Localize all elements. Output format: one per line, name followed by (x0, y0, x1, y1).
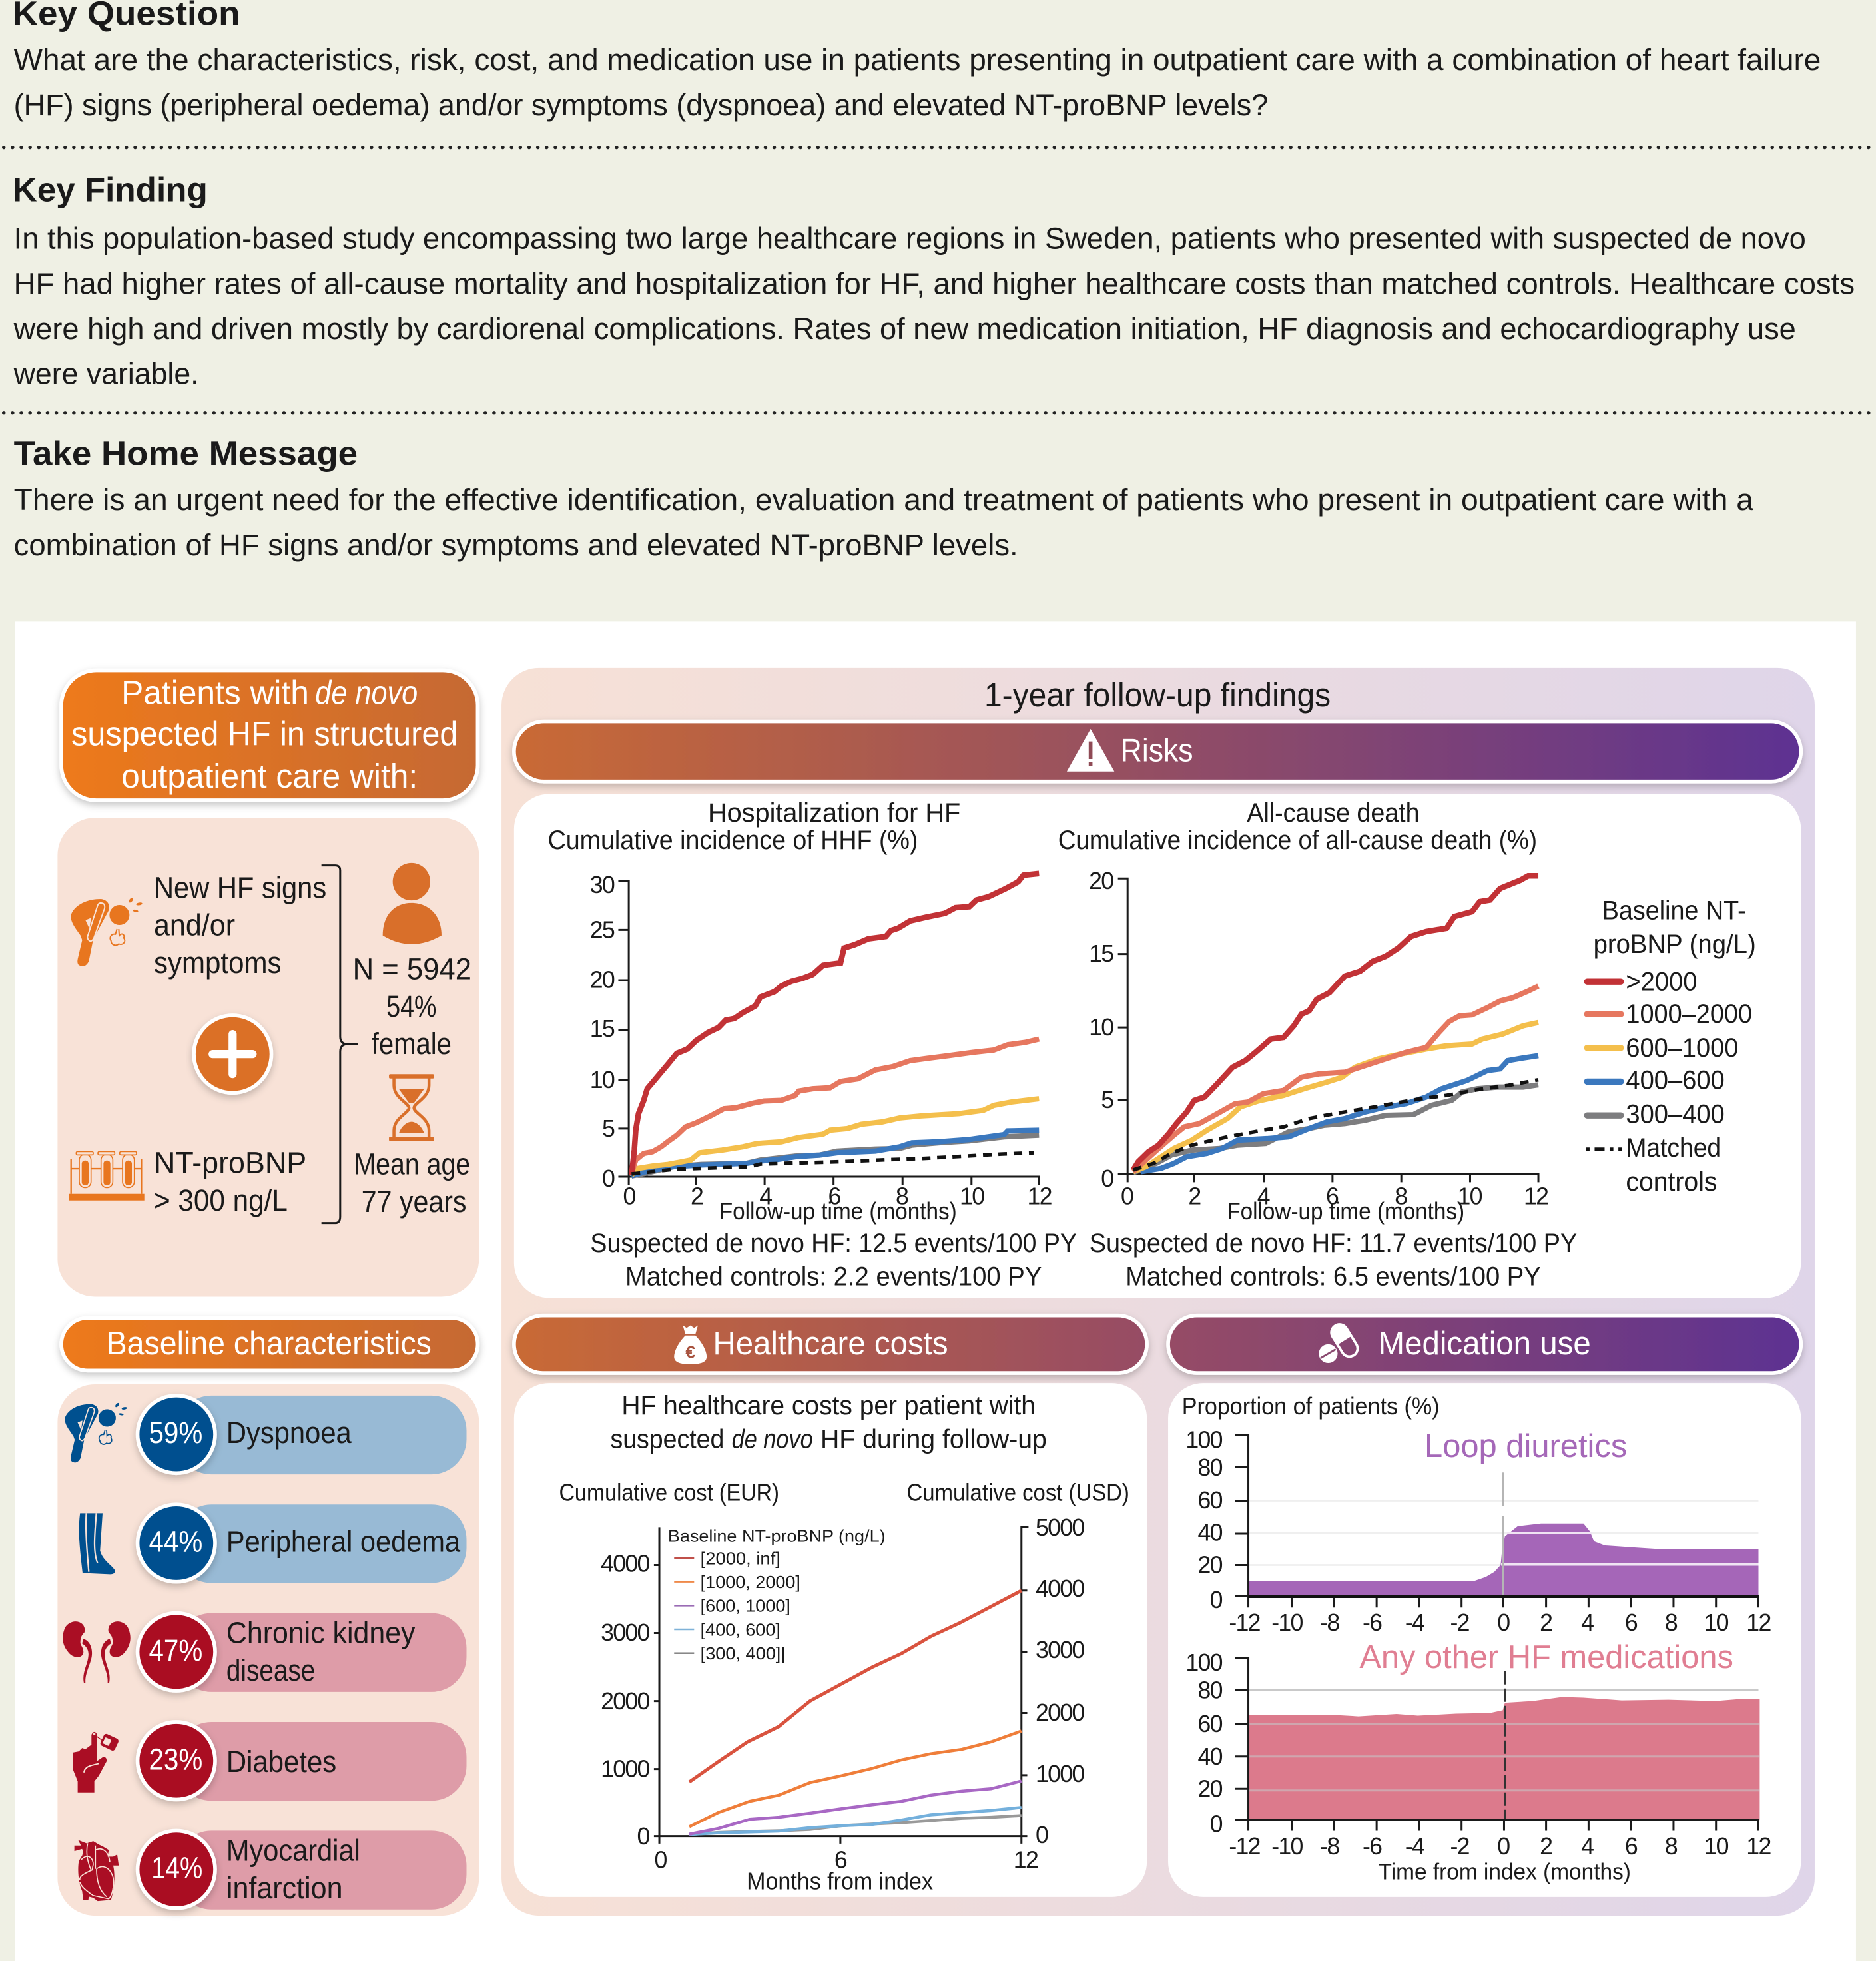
legend: cost chart (668, 1526, 886, 1663)
legend: cost chart: [600, 1000] (701, 1596, 790, 1616)
text block: key question (13, 0, 1821, 122)
row: diabetes: 23% (149, 1742, 202, 1776)
text: NT-proBNP threshold: > 300 ng/L (154, 1183, 288, 1217)
heading pill: medication use (1168, 1316, 1801, 1373)
text: mean age: Mean age (354, 1147, 470, 1181)
chart: all-cause death: Cumulative incidence of all-cause death (%) (1058, 826, 1537, 855)
row: peripheral oedema (79, 1504, 466, 1583)
panel: medication use charts (1168, 1383, 1801, 1897)
chart: any other HF medications: 8 (1665, 1833, 1678, 1860)
row: chronic kidney disease: disease (226, 1653, 315, 1687)
text: sample size and sex: female (372, 1027, 452, 1061)
chart: loop diuretics: -12 (1229, 1609, 1261, 1636)
chart: loop diuretics: 4 (1581, 1609, 1594, 1636)
panel: healthcare costs chart: 5000 (1036, 1514, 1084, 1541)
row: myocardial infarction: Myocardial (226, 1833, 360, 1867)
chart: hospitalization for HF: 2 (691, 1183, 703, 1210)
chart: hospitalization for HF: 10 (960, 1183, 984, 1210)
icon: dyspnoea figure (71, 897, 143, 966)
brace (322, 866, 358, 1223)
chart: hospitalization for HF: 15 (590, 1015, 615, 1042)
panel: healthcare costs chart (514, 1383, 1147, 1897)
chart: any other HF medications: 6 (1625, 1833, 1638, 1860)
row: chronic kidney disease: Chronic kidney (226, 1616, 416, 1650)
panel: healthcare costs chart: 0 (1036, 1822, 1048, 1848)
heading pill: patients with de novo suspected HF: suspected HF in structured (71, 714, 458, 752)
row: chronic kidney disease: 47% (149, 1633, 202, 1667)
row: diabetes: Diabetes (226, 1745, 336, 1779)
chart: hospitalization for HF: 4 (759, 1183, 772, 1210)
legend: baseline NT-proBNP: Baseline NT- (1602, 896, 1746, 925)
text: new HF signs and/or symptoms: New HF signs (154, 870, 326, 904)
text: sample size and sex: N = 5942 (353, 952, 471, 985)
chart: loop diuretics: 20 (1197, 1552, 1223, 1579)
legend: cost chart: Baseline NT-proBNP (ng/L) (668, 1526, 886, 1546)
panel: healthcare costs chart: 0 (655, 1847, 667, 1874)
chart: loop diuretics: -4 (1405, 1609, 1424, 1636)
chart: loop diuretics: 10 (1704, 1609, 1729, 1636)
row: chronic kidney disease (63, 1613, 466, 1692)
heading pill: baseline characteristics: Baseline characteristics (107, 1326, 432, 1362)
panel: healthcare costs chart: 2000 (601, 1688, 650, 1715)
chart: loop diuretics: Loop diuretics (1424, 1428, 1627, 1464)
panel: healthcare costs chart: 3000 (1036, 1637, 1084, 1663)
panel: healthcare costs chart: HF during follow-up (820, 1425, 1047, 1454)
row: dyspnoea: Dyspnoea (226, 1416, 352, 1450)
text block: take home message: Take Home Message (14, 435, 358, 473)
chart: all-cause death (1058, 798, 1577, 1292)
chart: any other HF medications: 4 (1581, 1833, 1594, 1860)
chart: all-cause death: 8 (1395, 1183, 1407, 1210)
chart: loop diuretics: 8 (1665, 1609, 1678, 1636)
chart: any other HF medications (1185, 1639, 1771, 1885)
chart: any other HF medications: -10 (1271, 1833, 1303, 1860)
chart: loop diuretics (1185, 1427, 1771, 1636)
text: NT-proBNP threshold (154, 1146, 306, 1217)
chart: all-cause death: Suspected de novo HF: 11.7 events/100 PY (1090, 1229, 1577, 1258)
panel: healthcare costs chart: Cumulative cost (USD) (907, 1480, 1129, 1506)
text block: key question: What are the characteristics, risk, cost, and medication use in patients presenting in outpatient care with a combination of heart failure (14, 43, 1821, 77)
panel: healthcare costs chart: 3000 (601, 1619, 650, 1646)
line chart: cumulative cost (654, 1527, 1028, 1844)
icon: money bag (674, 1326, 707, 1364)
text block: take home message (14, 435, 1754, 562)
chart: loop diuretics: 12 (1746, 1609, 1771, 1636)
heading pill: medication use: Medication use (1379, 1326, 1591, 1362)
row: myocardial infarction: 14% (151, 1851, 202, 1885)
row: myocardial infarction: infarction (226, 1871, 343, 1905)
chart: any other HF medications: 100 (1185, 1649, 1223, 1676)
chart: hospitalization for HF: Follow-up time (months) (719, 1198, 957, 1225)
text block: key finding: were variable. (13, 357, 199, 391)
text block: key finding (13, 170, 1855, 391)
panel: healthcare costs chart: de novo (732, 1425, 813, 1454)
chart: loop diuretics: 80 (1197, 1454, 1223, 1481)
legend: baseline NT-proBNP: >2000 (1626, 967, 1697, 996)
chart: hospitalization for HF: 10 (590, 1067, 615, 1093)
chart: all-cause death: 2 (1188, 1183, 1201, 1210)
panel: healthcare costs chart: 1000 (601, 1756, 650, 1783)
chart: any other HF medications: -2 (1450, 1833, 1470, 1860)
chart: hospitalization for HF: 8 (896, 1183, 908, 1210)
heading pill: patients with de novo suspected HF (61, 671, 477, 800)
chart: loop diuretics: 0 (1497, 1609, 1510, 1636)
text block: key finding: were high and driven mostly by cardiorenal complications. Rates of new medication initiation, HF diagnosis and echocardiography use (13, 312, 1796, 346)
chart: hospitalization for HF: 0 (602, 1165, 615, 1192)
legend: baseline NT-proBNP: Matched (1626, 1133, 1721, 1163)
row: dyspnoea: 59% (149, 1416, 202, 1450)
chart: all-cause death: 10 (1457, 1183, 1482, 1210)
row: peripheral oedema: 44% (149, 1525, 202, 1559)
heading pill: baseline characteristics (61, 1318, 477, 1370)
heading: 1-year follow-up findings: 1-year follow-up findings (984, 676, 1331, 714)
chart: any other HF medications: 0 (1497, 1833, 1510, 1860)
legend: cost chart: [300, 400]| (701, 1643, 785, 1663)
text: NT-proBNP threshold: NT-proBNP (154, 1146, 306, 1180)
heading pill: patients with de novo suspected HF: de novo (315, 673, 418, 711)
chart: all-cause death: All-cause death (1247, 798, 1420, 828)
chart: hospitalization for HF: 20 (590, 967, 615, 993)
icon: pills (1319, 1321, 1361, 1363)
chart: hospitalization for HF: 0 (623, 1183, 636, 1210)
chart: any other HF medications: -12 (1229, 1833, 1261, 1860)
text: sample size and sex: 54% (386, 989, 436, 1023)
text block: key finding: In this population-based study encompassing two large healthcare regions in Sweden, patients who presented with suspected de novo (14, 222, 1806, 256)
panel: healthcare costs chart: 4000 (1036, 1575, 1084, 1602)
chart: hospitalization for HF: 30 (590, 872, 615, 898)
legend: cost chart: [2000, inf] (701, 1548, 781, 1568)
chart: loop diuretics: 60 (1197, 1487, 1223, 1514)
chart: loop diuretics: 6 (1625, 1609, 1638, 1636)
text: new HF signs and/or symptoms: and/or (154, 908, 235, 942)
panel: healthcare costs chart: suspected (610, 1425, 724, 1454)
chart: loop diuretics: 0 (1210, 1587, 1223, 1613)
heading pill: healthcare costs: Healthcare costs (713, 1326, 948, 1362)
chart: any other HF medications: 60 (1197, 1711, 1223, 1737)
legend: cost chart: [1000, 2000] (701, 1572, 800, 1592)
chart: all-cause death: 5 (1101, 1087, 1113, 1113)
chart: any other HF medications: Any other HF medications (1359, 1639, 1733, 1675)
chart: all-cause death: 12 (1524, 1183, 1548, 1210)
heading pill: patients with de novo suspected HF: outpatient care with: (121, 757, 418, 795)
chart: any other HF medications: -4 (1405, 1833, 1424, 1860)
text block: key finding: Key Finding (13, 170, 208, 208)
chart: any other HF medications: 80 (1197, 1677, 1223, 1703)
chart: all-cause death: Matched controls: 6.5 events/100 PY (1125, 1262, 1541, 1292)
panel: inclusion criteria and demographics (57, 818, 479, 1296)
panel: 1-year follow-up findings (501, 668, 1815, 1916)
chart: hospitalization for HF: 5 (602, 1115, 615, 1142)
legend: baseline NT-proBNP: 600–1000 (1626, 1033, 1738, 1063)
chart: hospitalization for HF: Matched controls: 2.2 events/100 PY (625, 1262, 1042, 1292)
panel: healthcare costs chart: Months from index (747, 1868, 933, 1895)
icon: hourglass (389, 1074, 434, 1141)
chart: any other HF medications: -6 (1363, 1833, 1382, 1860)
chart: any other HF medications: 20 (1197, 1776, 1223, 1803)
chart: hospitalization for HF: Suspected de novo HF: 12.5 events/100 PY (590, 1229, 1077, 1258)
chart: any other HF medications: Time from index (months) (1379, 1860, 1631, 1885)
chart: all-cause death: 15 (1089, 940, 1113, 967)
text block: take home message: There is an urgent need for the effective identification, evaluation and treatment of patients who present in outpatient care with a (14, 483, 1754, 517)
chart: all-cause death: 20 (1089, 868, 1113, 894)
panel: baseline characteristics (57, 1384, 479, 1916)
legend: cost chart: [400, 600] (701, 1619, 781, 1639)
text block: key question: (HF) signs (peripheral oedema) and/or symptoms (dyspnoea) and elevated NT-proBNP levels? (14, 88, 1268, 122)
chart: loop diuretics: 2 (1540, 1609, 1552, 1636)
text: mean age: 77 years (362, 1185, 466, 1219)
chart: any other HF medications: 40 (1197, 1743, 1223, 1770)
chart: loop diuretics: -8 (1320, 1609, 1339, 1636)
row: myocardial infarction (75, 1830, 466, 1910)
chart: all-cause death: 0 (1121, 1183, 1133, 1210)
chart: any other HF medications: 0 (1210, 1811, 1223, 1837)
icon: person (383, 863, 442, 944)
panel: healthcare costs chart: 6 (834, 1847, 847, 1874)
chart: hospitalization for HF: Hospitalization for HF (708, 798, 960, 828)
chart: all-cause death: 10 (1089, 1014, 1113, 1041)
row: diabetes (73, 1722, 466, 1801)
chart: any other HF medications: -8 (1320, 1833, 1339, 1860)
panel: medication use charts: Proportion of patients (%) (1182, 1393, 1440, 1420)
chart: loop diuretics: 40 (1197, 1520, 1223, 1546)
heading pill: healthcare costs (514, 1316, 1147, 1373)
legend: baseline NT-proBNP: proBNP (ng/L) (1594, 930, 1756, 959)
chart: all-cause death: 6 (1326, 1183, 1339, 1210)
text: mean age (354, 1147, 470, 1219)
legend: baseline NT-proBNP (1586, 896, 1756, 1197)
panel: healthcare costs chart: 1000 (1036, 1761, 1084, 1787)
text block: key finding: HF had higher rates of all-cause mortality and hospitalization for HF, and higher healthcare costs than matched controls. Healthcare costs (14, 266, 1855, 300)
panel: healthcare costs chart: HF healthcare costs per patient with (621, 1391, 1036, 1420)
chart: any other HF medications: 2 (1540, 1833, 1552, 1860)
chart: hospitalization for HF (548, 798, 1077, 1292)
row: dyspnoea (65, 1396, 466, 1474)
chart: hospitalization for HF: 12 (1027, 1183, 1052, 1210)
chart: hospitalization for HF: 25 (590, 916, 615, 943)
chart: loop diuretics: -10 (1271, 1609, 1303, 1636)
text: new HF signs and/or symptoms (154, 870, 326, 980)
chart: loop diuretics: -2 (1450, 1609, 1470, 1636)
legend: baseline NT-proBNP: 300–400 (1626, 1099, 1725, 1129)
chart: all-cause death: 4 (1257, 1183, 1270, 1210)
chart: loop diuretics: 100 (1185, 1427, 1223, 1454)
text: new HF signs and/or symptoms: symptoms (154, 946, 282, 980)
panel: healthcare costs chart: 12 (1014, 1847, 1038, 1874)
text: sample size and sex (353, 952, 471, 1061)
legend: baseline NT-proBNP: 400–600 (1626, 1066, 1725, 1095)
chart: all-cause death: 0 (1101, 1165, 1113, 1192)
panel: healthcare costs chart: 0 (637, 1823, 650, 1850)
chart: hospitalization for HF: Cumulative incidence of HHF (%) (548, 826, 918, 855)
heading pill: patients with de novo suspected HF: Patients with (121, 673, 309, 711)
legend: baseline NT-proBNP: 1000–2000 (1626, 999, 1752, 1029)
panel: healthcare costs chart: 2000 (1036, 1699, 1084, 1726)
legend: baseline NT-proBNP: controls (1626, 1167, 1717, 1197)
heading pill: risks: Risks (1121, 733, 1193, 769)
chart: any other HF medications: 10 (1704, 1833, 1729, 1860)
icon: test tubes (69, 1151, 145, 1201)
icon: plus (194, 1015, 272, 1093)
white figure panel (15, 621, 1856, 1961)
heading pill: risks (514, 722, 1801, 782)
panel: healthcare costs chart: Cumulative cost (EUR) (559, 1480, 779, 1506)
chart: hospitalization for HF: 6 (828, 1183, 841, 1210)
chart: any other HF medications: 12 (1746, 1833, 1771, 1860)
chart: all-cause death: Follow-up time (months) (1227, 1198, 1464, 1225)
panel: healthcare costs chart: 4000 (601, 1551, 650, 1577)
text block: take home message: combination of HF signs and/or symptoms and elevated NT-proBNP levels. (14, 528, 1018, 562)
icon: money bag: € (685, 1342, 695, 1362)
row: peripheral oedema: Peripheral oedema (226, 1525, 461, 1559)
panel: risk charts (514, 794, 1801, 1298)
chart: loop diuretics: -6 (1363, 1609, 1382, 1636)
